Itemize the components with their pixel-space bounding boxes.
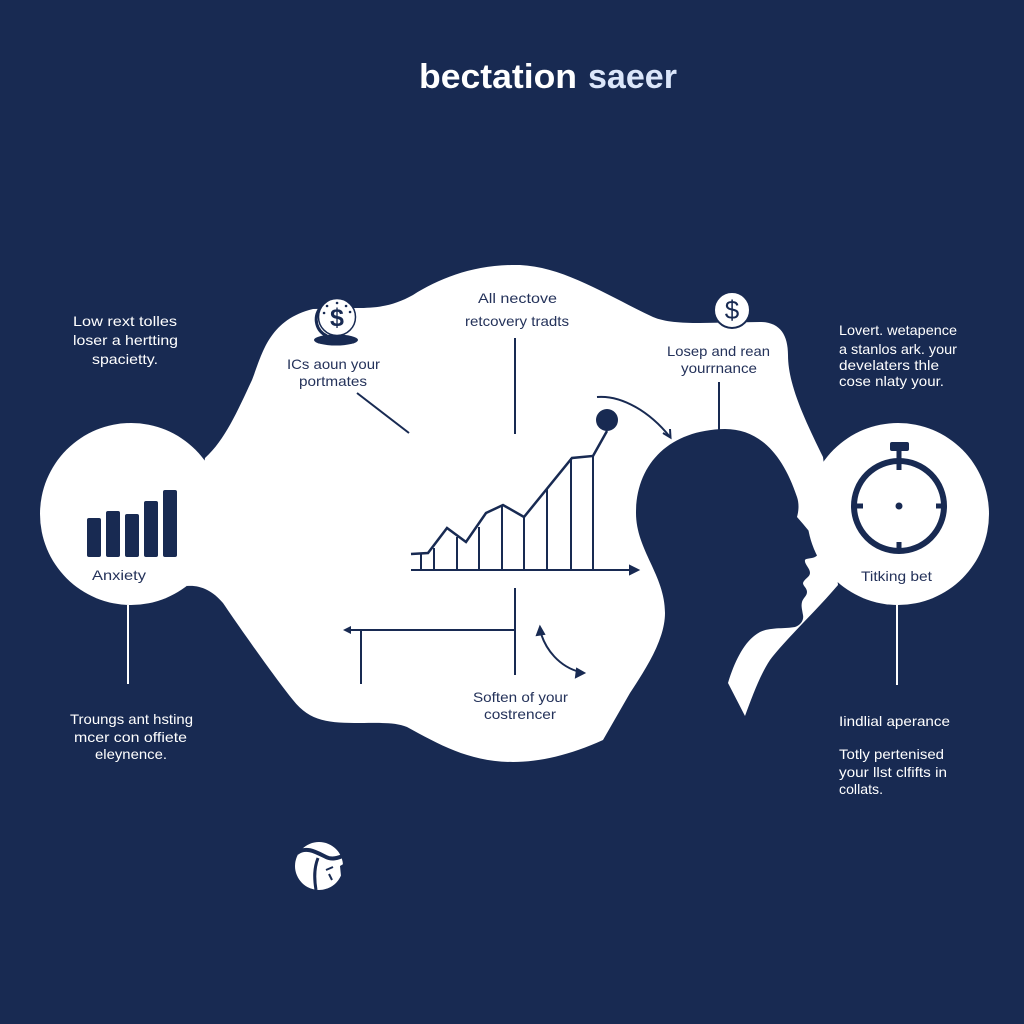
text: portmates: [287, 356, 380, 389]
text: bottom left: eleynence.: [95, 746, 167, 762]
text: bottom right: Iindlial aperance: [839, 713, 950, 729]
text: bottom right: your llst clfifts in: [839, 764, 947, 780]
icon: dollar coin: $: [725, 295, 740, 325]
curved arrow: lower: [537, 627, 584, 677]
label: ticking bet: Titking bet: [861, 568, 932, 584]
text: bottom right: Totly pertenised: [839, 746, 944, 762]
text: top right: Lovert. wetapence: [839, 322, 957, 338]
icon: bottom logo: [295, 842, 346, 890]
text: top right: [839, 322, 957, 389]
panel: central white flowing shape with head silhouette: [187, 265, 838, 762]
panel: timer circle: [807, 423, 989, 605]
text: bottom left: Troungs ant hsting: [70, 711, 193, 727]
icon: bar chart: [87, 490, 177, 557]
text: top right: cose nlaty your.: [839, 373, 944, 389]
icon: stopwatch: [854, 442, 944, 551]
text: costrencer: costrencer: [484, 706, 556, 722]
text: bottom right: [839, 713, 950, 797]
title: bectation: [419, 58, 577, 96]
connector lines: [347, 338, 719, 684]
text: bottom right: collats.: [839, 781, 883, 797]
icon: dollar globe: [314, 298, 358, 346]
text: recovery: All nectove: [478, 290, 557, 306]
title: saeer: [588, 58, 677, 96]
text: top left: [73, 313, 178, 367]
text: top left: spacietty.: [92, 351, 158, 367]
curved arrow: to head: [597, 397, 670, 438]
label: anxiety: Anxiety: [92, 567, 146, 583]
text: costrencer: Soften of your: [473, 689, 568, 705]
text: portmates: portmates: [299, 373, 367, 389]
text: costrencer: [473, 689, 568, 722]
text: top left: loser a hertting: [73, 332, 178, 348]
text: portmates: ICs aoun your: [287, 356, 380, 372]
text: yourrnance: Losep and rean: [667, 343, 770, 359]
text: recovery: retcovery tradts: [465, 313, 569, 329]
title: [419, 58, 677, 96]
text: top right: develaters thle: [839, 357, 939, 373]
text: yourrnance: yourrnance: [681, 360, 757, 376]
text: recovery: [465, 290, 569, 329]
text: yourrnance: [667, 343, 770, 376]
arrowhead: left: [343, 626, 351, 634]
line chart: [411, 409, 638, 574]
icon: dollar coin: [714, 292, 750, 328]
text: bottom left: mcer con offiete: [74, 729, 187, 745]
text: bottom left: [70, 711, 193, 762]
icon: dollar globe: $: [330, 304, 344, 332]
text: top right: a stanlos ark. your: [839, 341, 957, 357]
text: top left: Low rext tolles: [73, 313, 177, 329]
white connector lines: [128, 604, 897, 685]
panel: anxiety circle: [40, 423, 222, 605]
